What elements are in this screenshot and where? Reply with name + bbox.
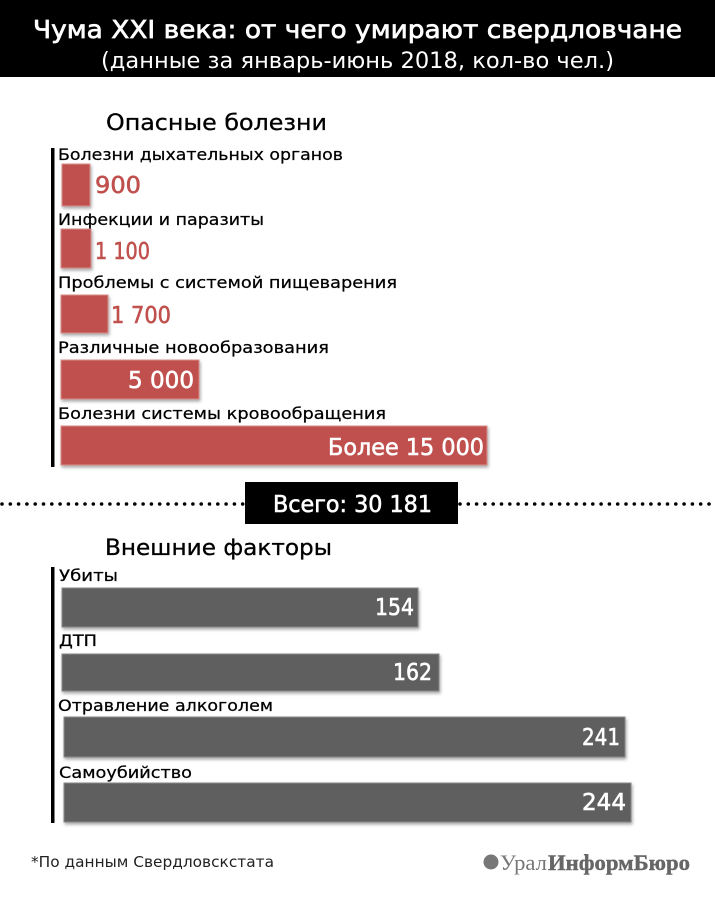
row: infections: 1 100 bbox=[95, 239, 150, 265]
heading: external factors: Внешние факторы bbox=[105, 536, 332, 561]
row: suicide: 244 bbox=[582, 790, 626, 816]
row: infections: Инфекции и паразиты bbox=[58, 210, 264, 229]
row: alcohol poisoning: Отравление алкоголем bbox=[58, 696, 273, 715]
row: killed bbox=[59, 566, 418, 627]
axis bbox=[51, 567, 54, 823]
source note: *По данным Свердловскстата bbox=[31, 853, 274, 871]
row: circulatory: Более 15 000 bbox=[328, 435, 484, 461]
row: road accidents: ДТП bbox=[59, 631, 97, 650]
axis bbox=[51, 148, 54, 467]
logo: Урал bbox=[500, 850, 547, 875]
row: respiratory: 900 bbox=[95, 173, 141, 199]
row: neoplasms: Различные новообразования bbox=[58, 338, 329, 357]
row: road accidents bbox=[59, 631, 439, 691]
header banner bbox=[0, 0, 715, 77]
total callout bbox=[245, 482, 458, 524]
row: killed: Убиты bbox=[59, 566, 118, 585]
row: suicide bbox=[59, 763, 631, 822]
row: neoplasms bbox=[58, 338, 329, 399]
heading: dangerous diseases: Опасные болезни bbox=[106, 111, 327, 136]
panel: external factors bar chart bbox=[51, 566, 631, 823]
row: respiratory bbox=[58, 145, 343, 206]
row: alcohol poisoning: 241 bbox=[582, 725, 620, 751]
row: respiratory: Болезни дыхательных органов bbox=[58, 145, 343, 164]
row: digestion: 1 700 bbox=[111, 303, 171, 329]
row: circulatory: Болезни системы кровообращения bbox=[58, 404, 386, 423]
total callout: Всего: 30 181 bbox=[273, 492, 432, 518]
logo: ИнформБюро bbox=[548, 850, 690, 875]
row: digestion: Проблемы с системой пищеварения bbox=[58, 273, 397, 292]
row: circulatory bbox=[58, 404, 487, 465]
row: killed: 154 bbox=[375, 595, 414, 621]
row: neoplasms: 5 000 bbox=[128, 368, 194, 394]
row: alcohol poisoning bbox=[58, 696, 625, 757]
row: road accidents: 162 bbox=[393, 660, 432, 686]
panel: diseases bar chart bbox=[51, 145, 487, 467]
row: suicide: Самоубийство bbox=[59, 763, 192, 782]
subtitle: (данные за январь-июнь 2018, кол-во чел.) bbox=[101, 49, 614, 74]
logo bbox=[484, 850, 690, 875]
row: digestion bbox=[58, 273, 397, 333]
row: infections bbox=[58, 210, 264, 268]
title: Чума XXI века: от чего умирают свердловчане bbox=[33, 15, 682, 44]
